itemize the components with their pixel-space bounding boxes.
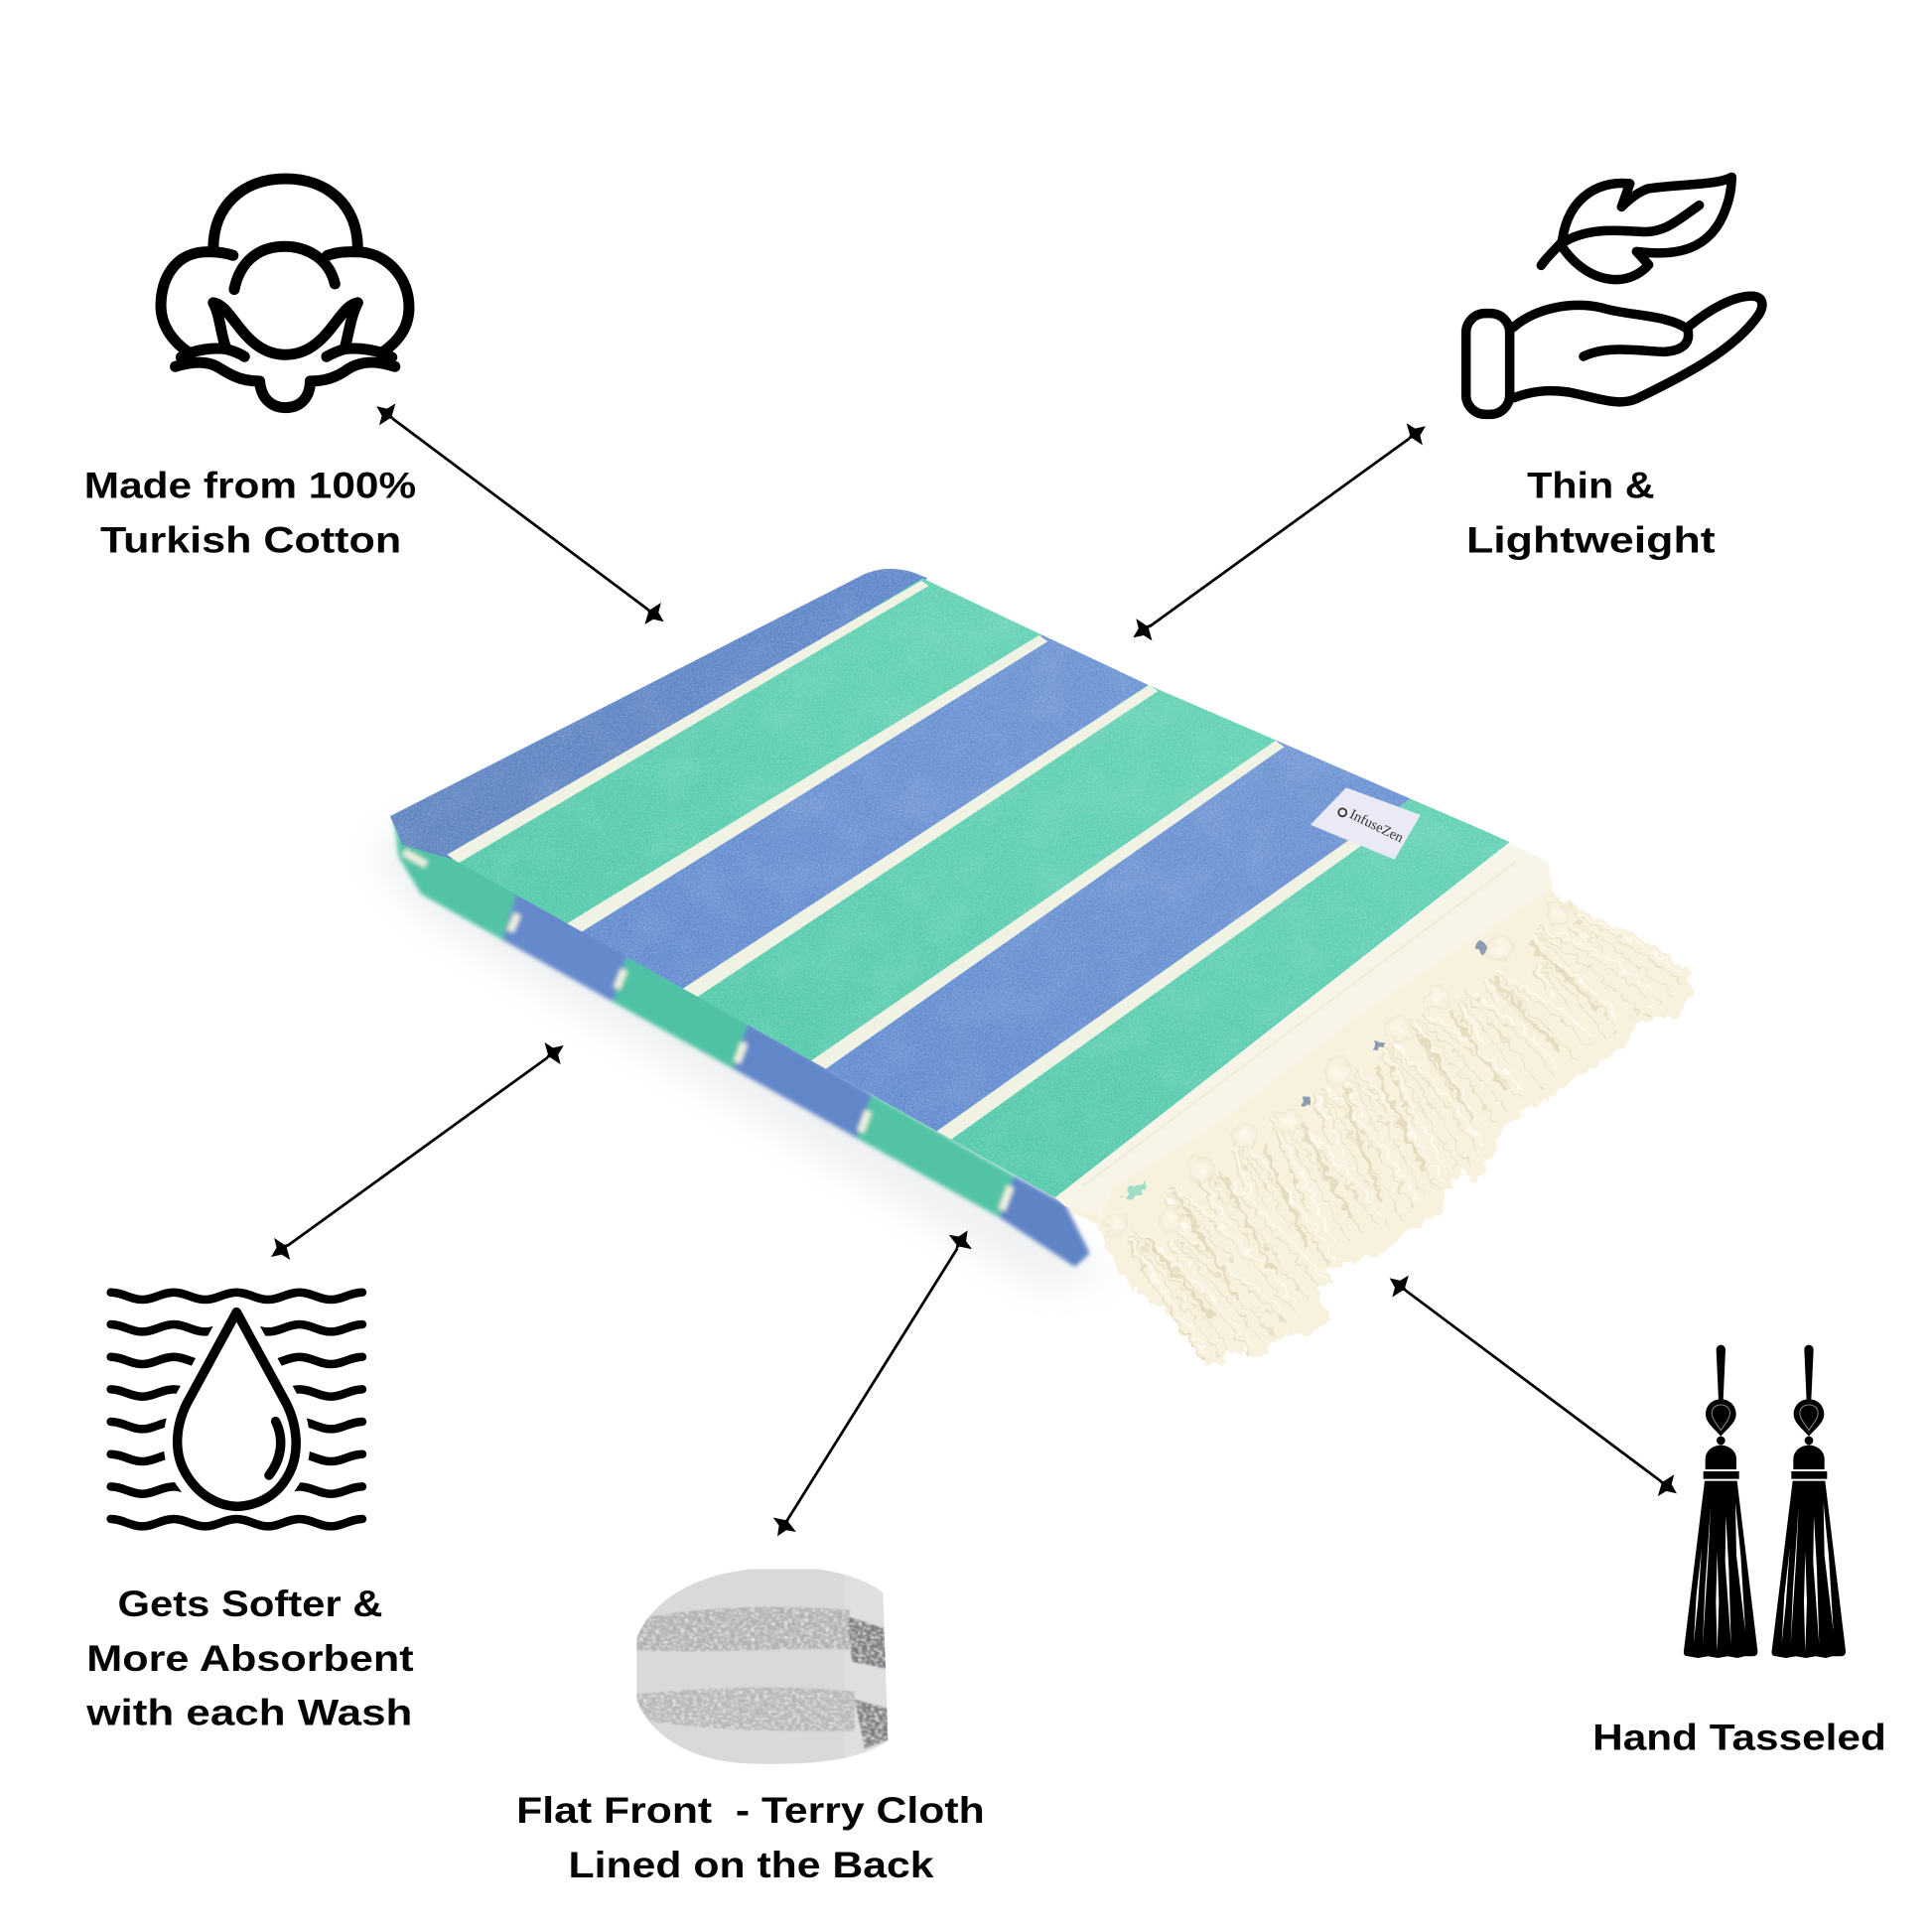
woven brand label: InfuseZen (1347, 807, 1406, 846)
towel soft shadow (371, 817, 1115, 1288)
arrow: tassels to towel (1381, 1267, 1685, 1504)
label: Thin & Lightweight (1466, 464, 1716, 560)
icon: hand holding leaf (1466, 177, 1762, 414)
arrow: lightweight to towel (1125, 415, 1434, 648)
fringe tassels (1059, 847, 1697, 1374)
swatch: terry cloth photo (636, 1569, 888, 1764)
label: Hand Tasseled: Hand Tasseled (1592, 1717, 1886, 1758)
label: Flat Front - Terry Cloth Lined on the Back: Flat Front - Terry Cloth (516, 1789, 985, 1831)
label: Flat Front - Terry Cloth Lined on the Back: Lined on the Back (569, 1844, 934, 1885)
label: Gets Softer & More Absorbent with each Wash: Gets Softer & (118, 1583, 382, 1624)
tassel left (1684, 1345, 1757, 1658)
icon: water drop with waves (111, 1293, 362, 1526)
label: Made from 100% Turkish Cotton: Made from 100% (84, 464, 416, 505)
label: Gets Softer & More Absorbent with each Wash (85, 1583, 414, 1733)
label: Gets Softer & More Absorbent with each Wash: More Absorbent (86, 1637, 414, 1679)
label: Thin & Lightweight: Thin & (1527, 464, 1655, 505)
label: Gets Softer & More Absorbent with each Wash: with each Wash (85, 1692, 412, 1733)
label: Made from 100% Turkish Cotton: Turkish Cotton (100, 518, 401, 560)
label: Made from 100% Turkish Cotton (84, 464, 416, 560)
arrow: absorbent to towel (263, 1035, 572, 1268)
arrow: cotton to towel (368, 395, 672, 632)
lower folded layer (394, 820, 1090, 1267)
woven brand label (1311, 787, 1421, 860)
arrow: terry cloth to towel (765, 1223, 979, 1544)
cream hem band (1055, 844, 1553, 1216)
tassel right (1772, 1345, 1846, 1658)
icon: pair of tassels (1684, 1345, 1846, 1658)
label: Flat Front - Terry Cloth Lined on the Back (516, 1789, 985, 1885)
product photo: folded towel (371, 554, 1697, 1374)
label: Thin & Lightweight: Lightweight (1466, 518, 1716, 560)
top surface stripes (380, 554, 1532, 1210)
icon: cotton boll (161, 179, 409, 408)
